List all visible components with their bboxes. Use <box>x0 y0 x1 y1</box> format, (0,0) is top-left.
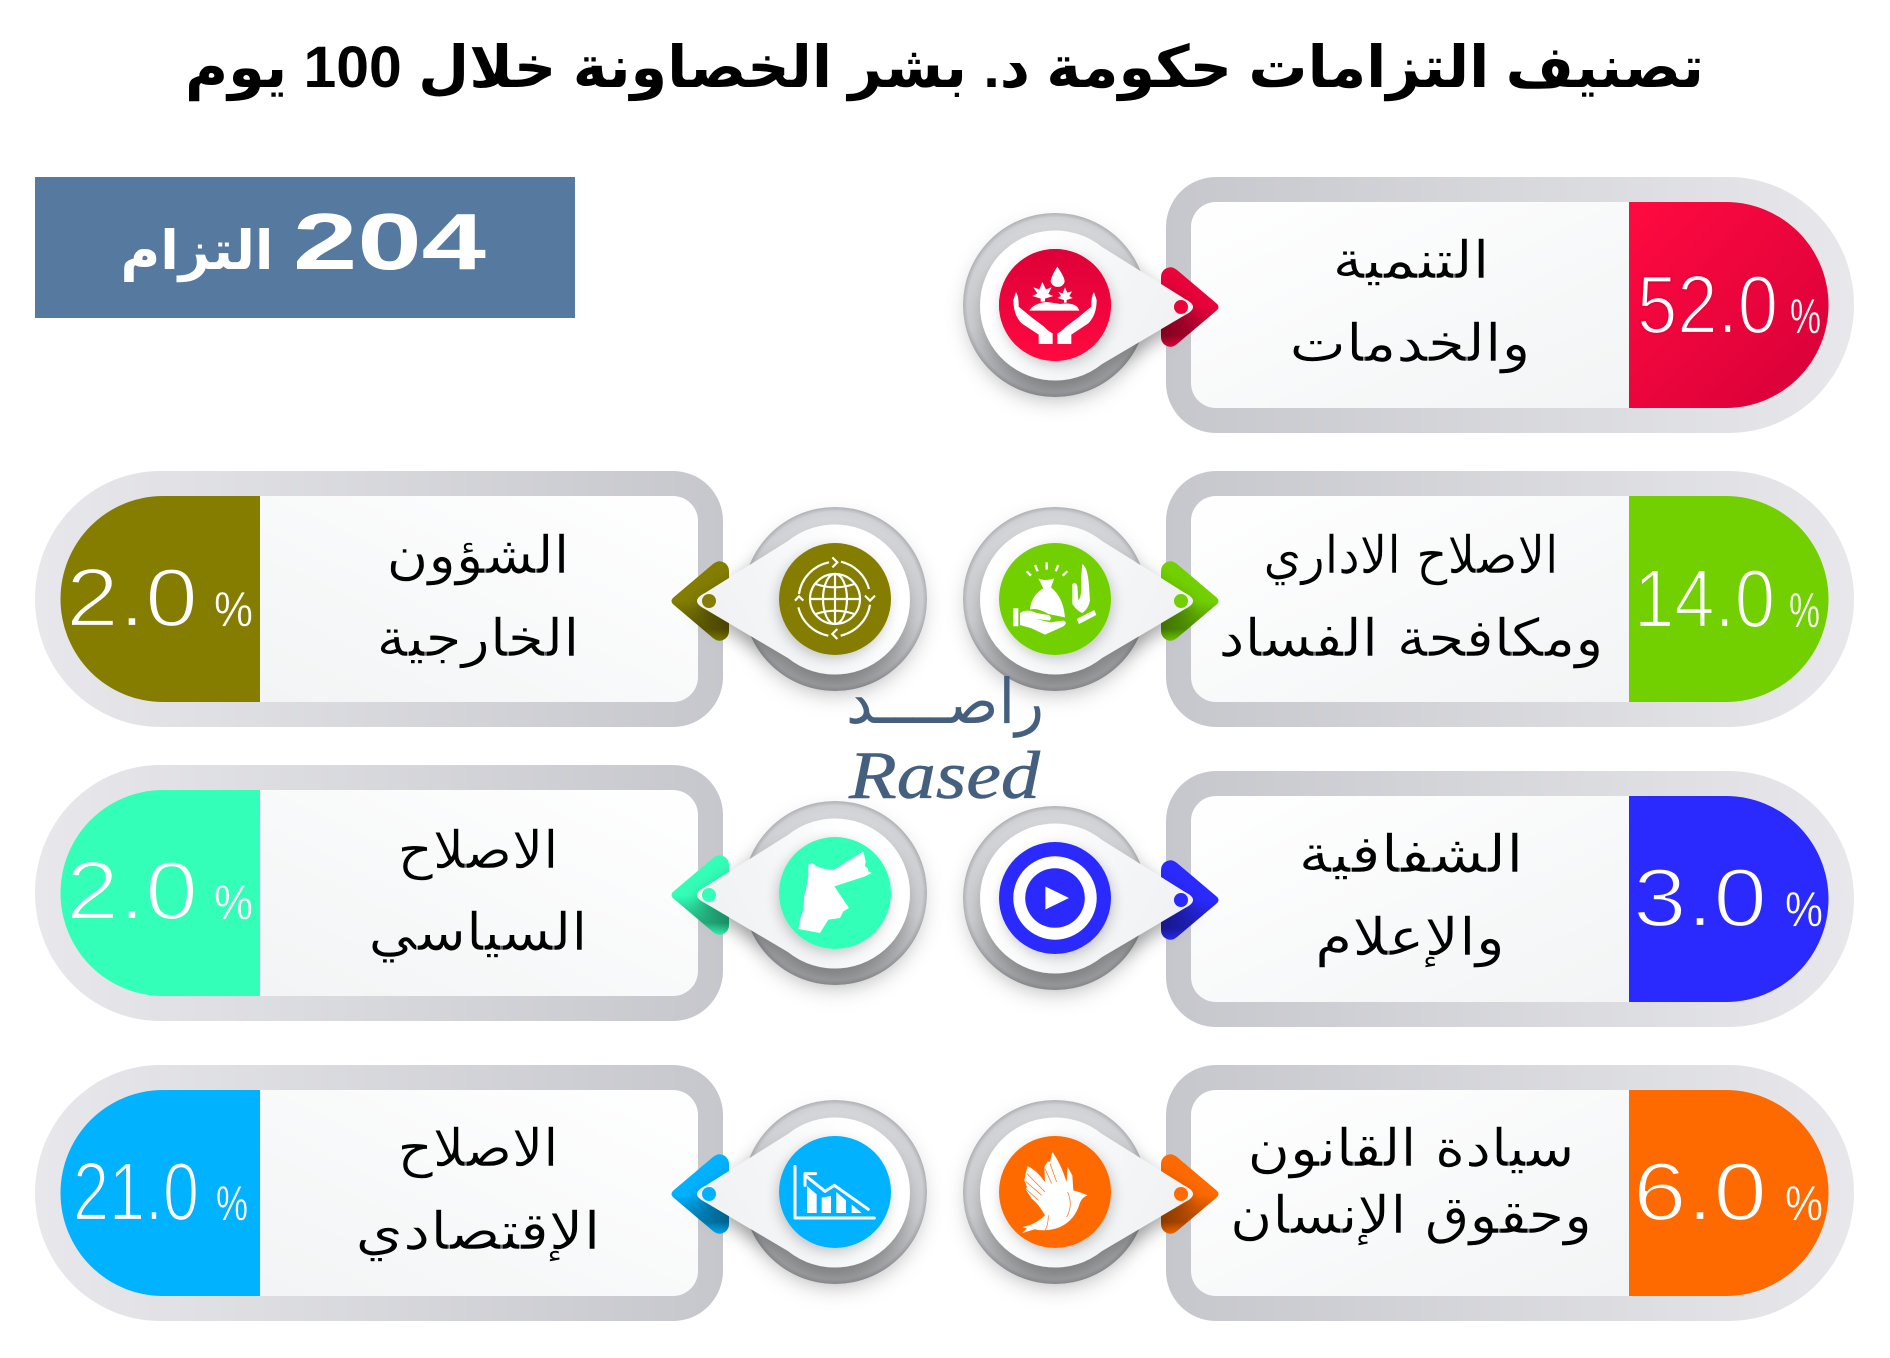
logo: Rased <box>846 665 1044 813</box>
percentage: % <box>214 876 253 930</box>
category label: الخارجية <box>376 609 580 669</box>
card frame <box>1166 771 1854 1027</box>
category label: ومكافحة الفساد <box>1218 609 1604 669</box>
panel: foreign affairs 2.0% <box>35 471 927 727</box>
percentage <box>66 551 253 644</box>
percentage: % <box>1789 584 1820 638</box>
percentage: 3.0 <box>1633 851 1767 944</box>
category label: السياسي <box>368 903 588 963</box>
total count: 204 <box>293 197 487 286</box>
category label <box>356 1119 600 1262</box>
percentage <box>66 844 253 937</box>
percentage: % <box>216 1177 248 1231</box>
percentage: % <box>1790 290 1821 344</box>
percentage: 14.0 <box>1634 552 1775 645</box>
percentage: 6.0 <box>1633 1145 1767 1238</box>
panel: transparency and media 3.0% <box>963 771 1854 1027</box>
title: تصنيف التزامات حكومة د. بشر الخصاونة خلال 100 يوم <box>185 35 1704 102</box>
percentage: % <box>214 583 253 637</box>
category label: سيادة القانون <box>1248 1119 1574 1179</box>
panel: rule of law and human rights 6.0% <box>963 1065 1854 1321</box>
category label <box>1230 1119 1592 1246</box>
category label: والإعلام <box>1315 908 1505 968</box>
percentage: 2.0 <box>66 844 198 937</box>
category label: والخدمات <box>1290 314 1530 374</box>
total commitments box <box>35 177 575 318</box>
card frame <box>1166 1065 1854 1321</box>
category label: الإقتصادي <box>356 1202 600 1262</box>
category label: الاصلاح <box>398 821 558 881</box>
panel: administrative reform 14.0% <box>963 471 1854 727</box>
icon: money bag and hands <box>963 507 1218 691</box>
card frame <box>35 471 723 727</box>
card frame <box>35 1065 723 1321</box>
percentage: % <box>1785 1177 1823 1231</box>
card frame <box>1166 177 1854 433</box>
category label: الشؤون <box>386 526 570 586</box>
icon: declining bar chart <box>672 1100 927 1284</box>
category label: الشفافية <box>1298 825 1524 885</box>
panel: political reform 2.0% <box>35 765 927 1021</box>
category label <box>1298 825 1524 968</box>
category label <box>1290 231 1530 374</box>
category label: وحقوق الإنسان <box>1230 1186 1592 1246</box>
icon: globe with arrows <box>672 507 927 691</box>
panel: development and services 52.0% <box>963 177 1854 433</box>
percentage: % <box>1785 883 1823 937</box>
percentage: 2.0 <box>66 551 198 644</box>
category label: التنمية <box>1332 231 1490 291</box>
category label <box>376 526 580 669</box>
logo Latin wordmark: Rased <box>848 737 1041 813</box>
percentage: 21.0 <box>73 1145 199 1238</box>
icon: hands holding plants and water drop <box>963 213 1218 397</box>
total label: التزام <box>120 219 274 282</box>
percentage <box>1633 851 1823 944</box>
icon: dove <box>963 1100 1218 1284</box>
percentage <box>1633 1145 1823 1238</box>
category label: الاصلاح الاداري <box>1264 526 1558 586</box>
card frame <box>1166 471 1854 727</box>
percentage: 52.0 <box>1637 258 1778 351</box>
card frame <box>35 765 723 1021</box>
logo Arabic wordmark: راصــــد <box>846 665 1044 738</box>
panel: economic reform 21.0% <box>35 1065 927 1321</box>
icon: play button <box>963 806 1218 990</box>
category label: الاصلاح <box>398 1119 558 1179</box>
category label <box>1218 526 1604 669</box>
category label <box>368 821 588 963</box>
icon: map of Jordan <box>672 801 927 985</box>
